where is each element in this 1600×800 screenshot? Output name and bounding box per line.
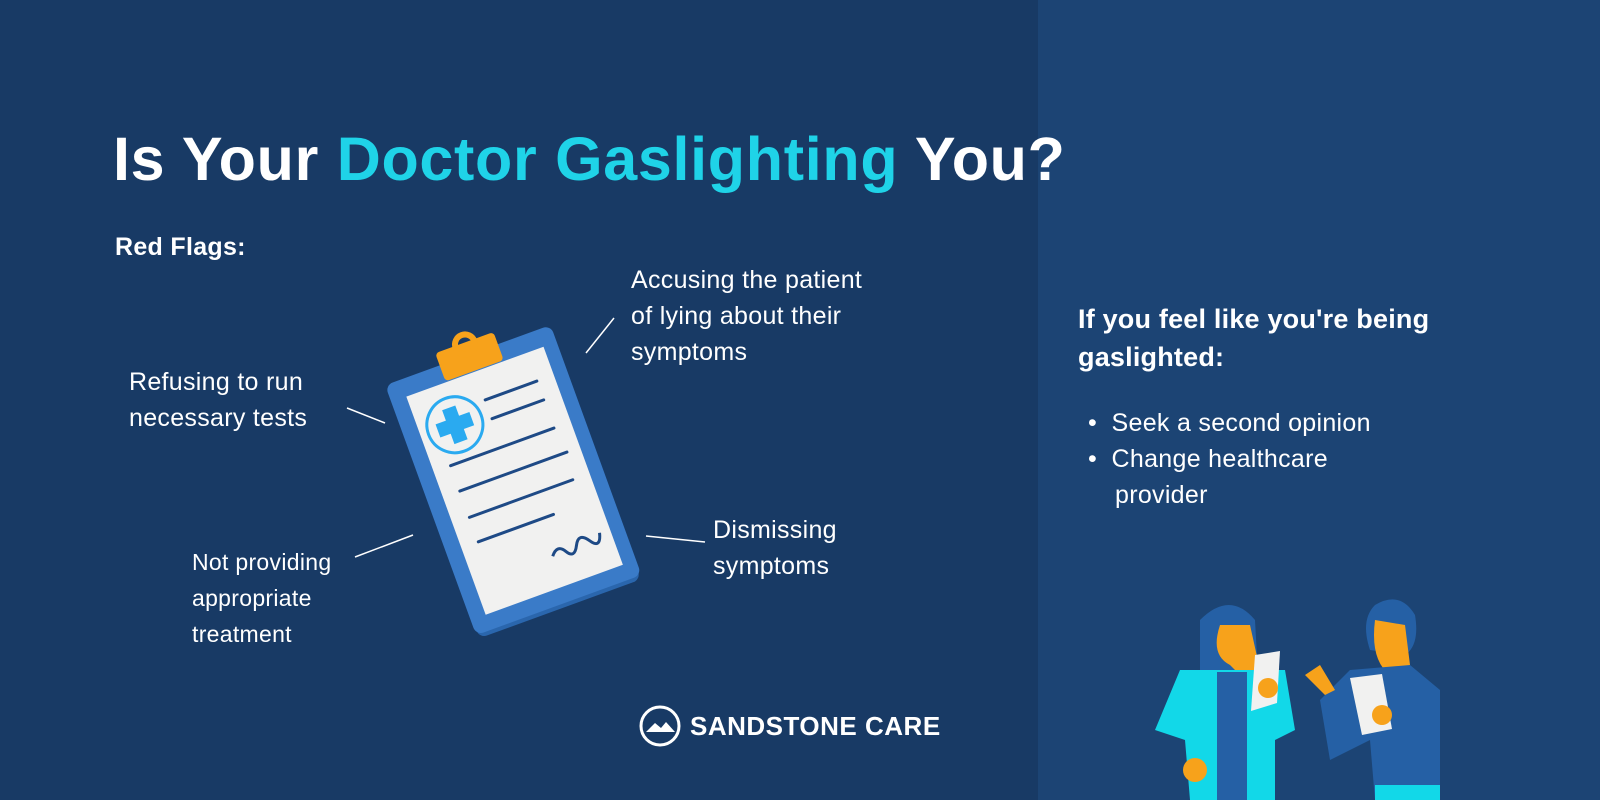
label: not providing: treatment (192, 621, 292, 647)
label: accusing: Accusing the patient (631, 266, 862, 294)
list: actions (1088, 409, 1371, 509)
list: actions: • Change healthcare (1088, 445, 1328, 473)
subheading: red flags: Red Flags: (115, 233, 246, 261)
label: dismissing: symptoms (713, 552, 829, 580)
illustration: two people (1155, 599, 1440, 800)
logo: sandstone care: SANDSTONE CARE (690, 710, 941, 740)
logo: sandstone care (640, 706, 941, 746)
label: refusing (129, 368, 307, 432)
label: not providing: appropriate (192, 585, 312, 611)
label: accusing: symptoms (631, 338, 747, 366)
list: actions: • Seek a second opinion (1088, 409, 1371, 437)
label: not providing: Not providing (192, 549, 331, 575)
title: Is Your Doctor Gaslighting You? (113, 125, 1066, 193)
label: accusing (631, 266, 862, 366)
list: actions: provider (1115, 481, 1208, 509)
label: refusing: necessary tests (129, 404, 307, 432)
label: dismissing (713, 516, 837, 580)
heading: if you feel: gaslighted: (1078, 342, 1224, 372)
heading: if you feel: If you feel like you're being (1078, 304, 1429, 334)
label: accusing: of lying about their (631, 302, 841, 330)
heading: if you feel (1078, 304, 1429, 372)
label: not providing (192, 549, 331, 647)
icon: clipboard (387, 327, 640, 636)
connector lines (346, 318, 706, 558)
right panel background (1038, 0, 1600, 800)
label: refusing: Refusing to run (129, 368, 303, 396)
label: dismissing: Dismissing (713, 516, 837, 544)
